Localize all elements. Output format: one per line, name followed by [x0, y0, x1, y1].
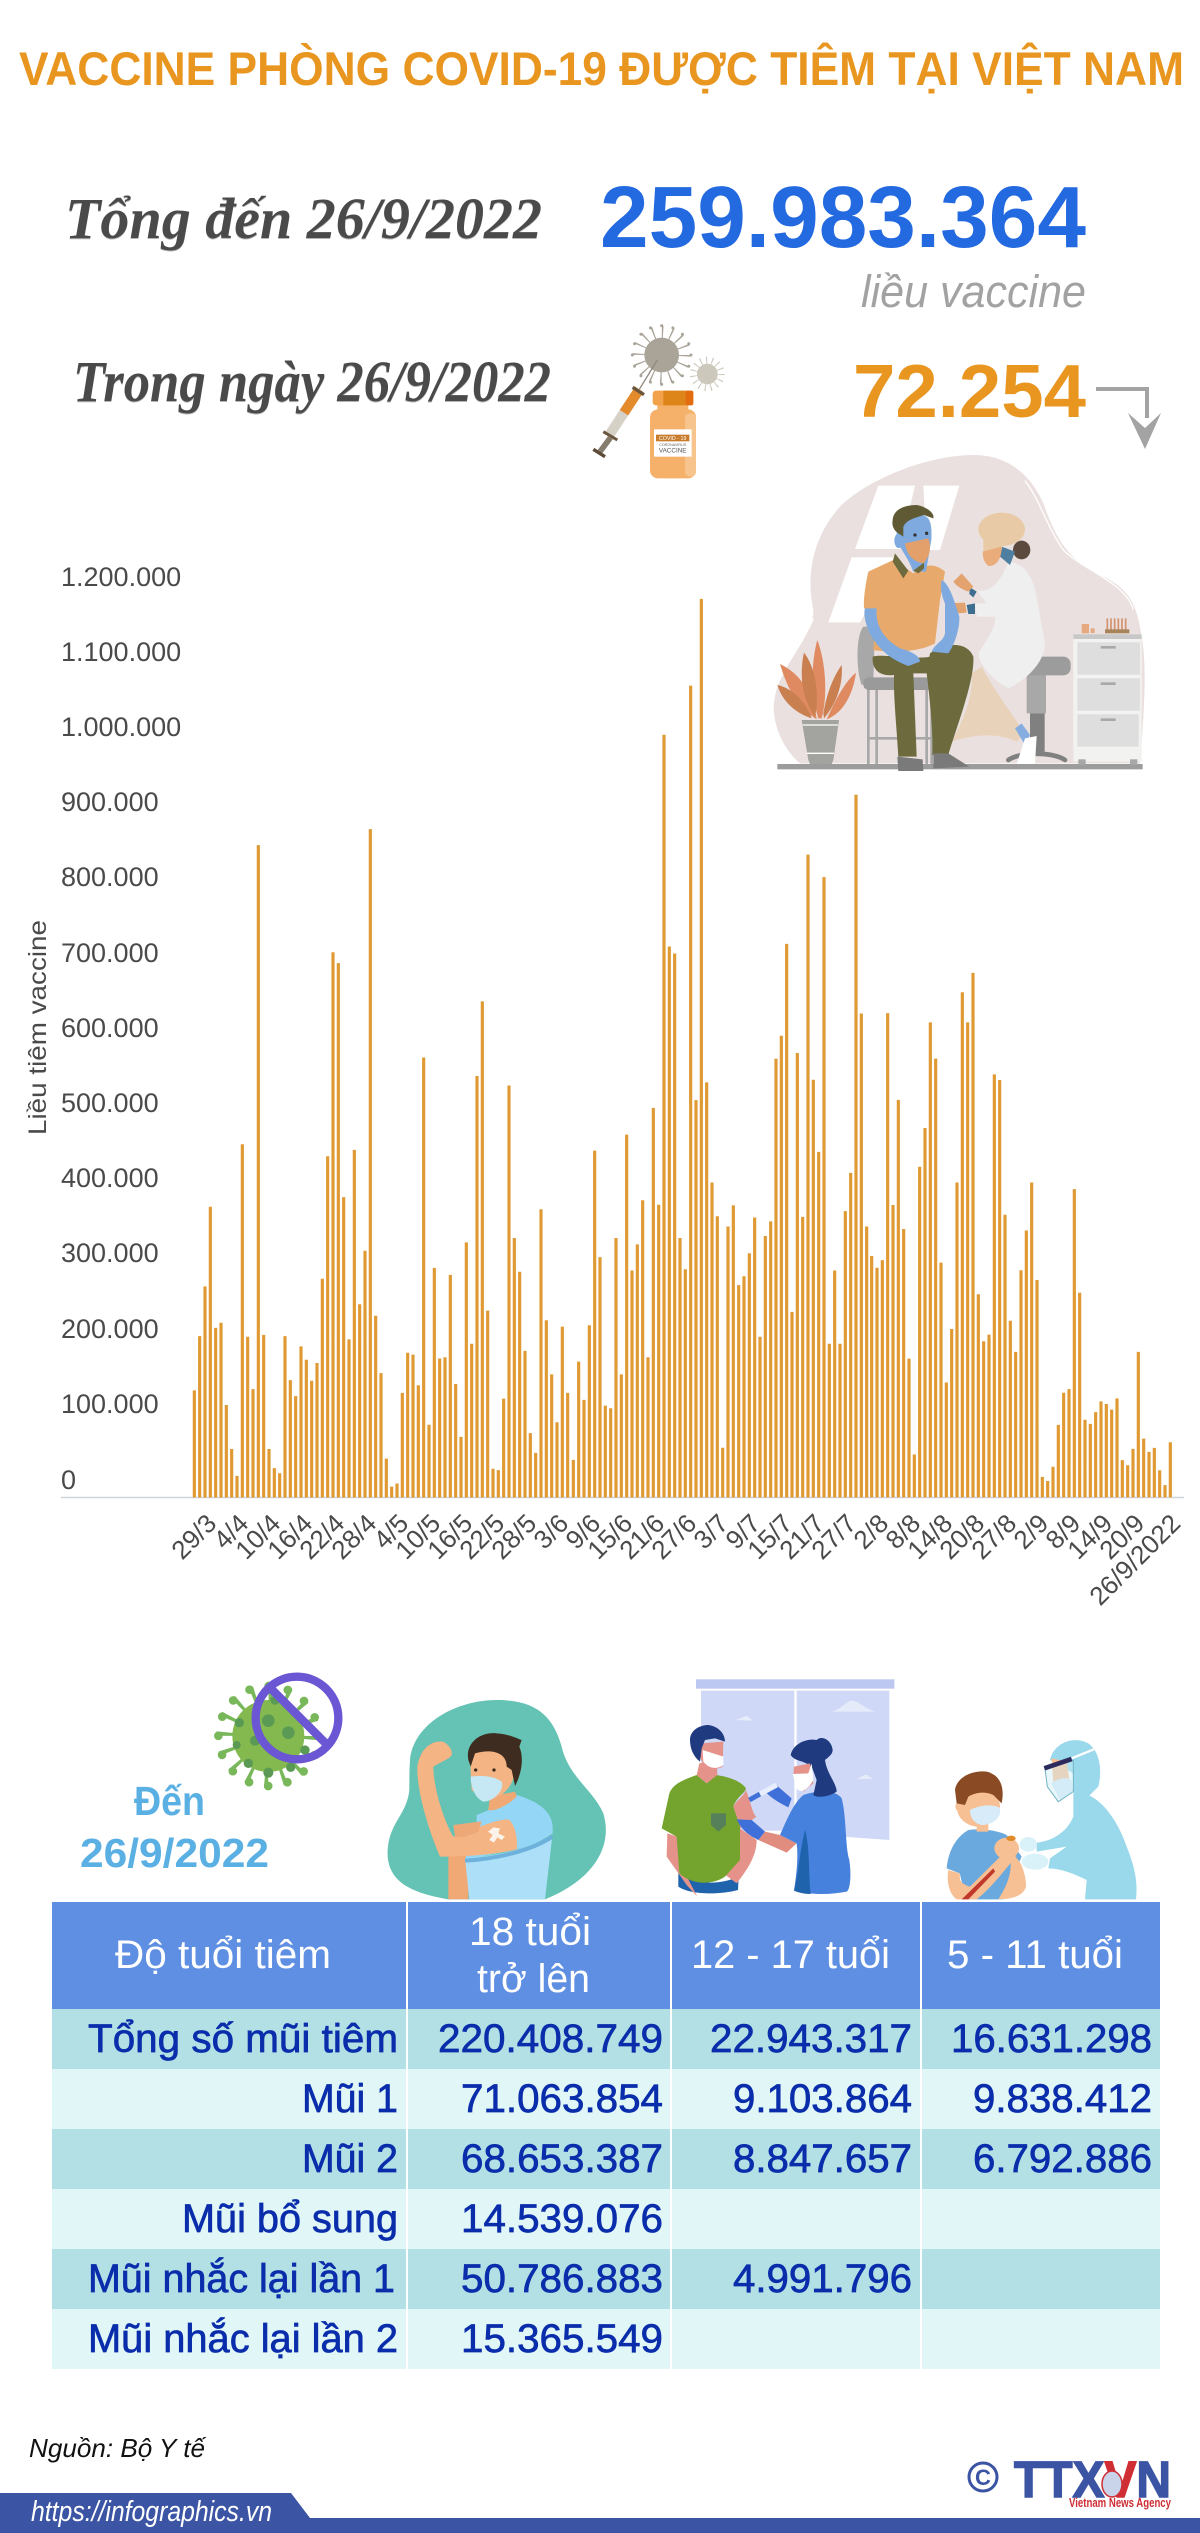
x axis date labels: 14/9 [1061, 1508, 1118, 1565]
table header: Độ tuổi tiêm [115, 1933, 331, 1977]
logo: TTXVN Vietnam News Agency: C [975, 2465, 991, 2490]
logo: TTXVN Vietnam News Agency: TTXVN [1014, 2451, 1171, 2508]
x axis date labels: 22/4 [293, 1508, 350, 1565]
table: doses by age group [52, 1902, 1160, 2369]
row: booster 2 [52, 2309, 1160, 2369]
row: additional dose [52, 2189, 1160, 2249]
x axis date labels: 4/4 [207, 1508, 254, 1555]
y axis labels: 900.000 [61, 787, 159, 817]
x axis date labels [165, 1508, 1186, 1611]
y axis labels: 100.000 [61, 1389, 159, 1419]
table header: 12 - 17 tuổi [691, 1933, 890, 1977]
y axis labels: 1.000.000 [61, 712, 181, 742]
row: dose 2 [52, 2129, 1160, 2189]
x axis date labels: 8/9 [1039, 1508, 1086, 1555]
x axis date labels: 10/5 [389, 1508, 446, 1565]
x axis date labels: 28/4 [325, 1508, 382, 1565]
y axis labels: 1.100.000 [61, 637, 181, 667]
x axis date labels: 3/6 [527, 1508, 574, 1555]
row: dose 2: 68.653.387 [461, 2137, 663, 2181]
row: dose 1 [52, 2069, 1160, 2129]
nurse [945, 513, 1071, 764]
row: total shots: 220.408.749 [438, 2017, 663, 2061]
heading: as of date: 26/9/2022 [80, 1830, 269, 1876]
y axis labels: 600.000 [61, 1013, 159, 1043]
table header [52, 1902, 1160, 2009]
y axis labels: 800.000 [61, 862, 159, 892]
row: booster 1 [52, 2249, 1160, 2309]
label: cumulative total: Tổng đến 26/9/2022 [65, 186, 542, 251]
baseline [61, 1496, 1184, 1498]
illustration: teen 12-17 being vaccinated by window [662, 1679, 894, 1897]
icon: crossed-out virus [218, 1677, 338, 1786]
row: additional dose: Mũi bổ sung [182, 2197, 398, 2241]
label: daily total: Trong ngày 26/9/2022 [73, 349, 551, 414]
row: dose 1: 9.838.412 [973, 2077, 1152, 2121]
y axis labels: 200.000 [61, 1314, 159, 1344]
y axis labels: 700.000 [61, 938, 159, 968]
x axis date labels: 9/7 [719, 1508, 766, 1555]
x axis date labels: 21/6 [613, 1508, 670, 1565]
row: dose 2: Mũi 2 [302, 2137, 398, 2181]
table header: 5 - 11 tuổi [947, 1933, 1123, 1977]
health worker [1020, 1740, 1137, 1899]
x axis date labels: 27/8 [965, 1508, 1022, 1565]
seated man [864, 505, 973, 771]
icon: syringe, virus and vaccine vial: VACCINE [659, 448, 687, 455]
x axis date labels: 16/4 [261, 1508, 318, 1565]
row: booster 1: 50.786.883 [461, 2257, 663, 2301]
nurse [737, 1738, 850, 1894]
y axis labels: 1.200.000 [61, 562, 181, 592]
number: daily doses: 72.254 [853, 349, 1086, 433]
y axis labels: 500.000 [61, 1088, 159, 1118]
x axis date labels: 16/5 [421, 1508, 478, 1565]
row: additional dose: 14.539.076 [461, 2197, 663, 2241]
x axis date labels: 2/9 [1007, 1508, 1054, 1555]
number: cumulative doses: 259.983.364 [600, 169, 1086, 266]
row: booster 2: Mũi nhắc lại lần 2 [88, 2316, 398, 2361]
unit: vaccine doses: liều vaccine [861, 266, 1086, 317]
chart: daily vaccine doses [24, 562, 1186, 1611]
row: dose 1: 71.063.854 [461, 2077, 663, 2121]
x axis date labels: 8/8 [879, 1508, 926, 1555]
row: dose 2: 8.847.657 [733, 2137, 912, 2181]
x axis date labels: 27/7 [805, 1508, 862, 1565]
x axis date labels: 14/8 [901, 1508, 958, 1565]
row: dose 1: 9.103.864 [733, 2077, 912, 2121]
x axis date labels: 15/6 [581, 1508, 638, 1565]
heading: as of date: Đến [134, 1778, 205, 1824]
x axis date labels: 3/7 [687, 1508, 734, 1555]
icon: syringe, virus and vaccine vial [593, 326, 721, 478]
x axis date labels: 15/7 [741, 1508, 798, 1565]
y axis labels: 300.000 [61, 1238, 159, 1268]
row: total shots: 22.943.317 [710, 2017, 912, 2061]
row: total shots [52, 2009, 1160, 2069]
row: total shots: Tổng số mũi tiêm [88, 2017, 398, 2061]
x axis date labels: 28/5 [485, 1508, 542, 1565]
bars [194, 599, 1170, 1498]
teen [662, 1725, 757, 1897]
x axis date labels: 4/5 [367, 1508, 414, 1555]
y axis labels [61, 562, 181, 1495]
footer band with URL [0, 2493, 1200, 2533]
x axis date labels: 20/8 [933, 1508, 990, 1565]
child [947, 1771, 1026, 1899]
panel: headline totals [65, 169, 1161, 449]
x axis date labels: 10/4 [229, 1508, 286, 1565]
row: booster 2: 15.365.549 [461, 2317, 663, 2361]
illustration: adult 18+ with bandaged arm [388, 1700, 606, 1899]
window [696, 1679, 894, 1840]
row: dose 1: Mũi 1 [302, 2077, 398, 2121]
icon: syringe, virus and vaccine vial: CORONAVIRUS [659, 443, 687, 447]
x axis date labels: 29/3 [165, 1508, 222, 1565]
icon: syringe, virus and vaccine vial: COVID - 19 [659, 436, 686, 442]
row: booster 1: 4.991.796 [733, 2257, 912, 2301]
table header: trở lên [477, 1957, 590, 2001]
table header: 18 tuổi [469, 1910, 591, 1954]
x axis date labels: 27/6 [645, 1508, 702, 1565]
x axis date labels: 22/5 [453, 1508, 510, 1565]
heading: as of date [80, 1778, 269, 1876]
source note: Nguồn: Bộ Y tế [29, 2433, 207, 2463]
y axis title: Liều tiêm vaccine [24, 920, 52, 1135]
medicine cabinet [1073, 618, 1142, 765]
footer band with URL: https://infographics.vn [31, 2496, 272, 2528]
y axis labels: 400.000 [61, 1163, 159, 1193]
illustration: nurse vaccinating a seated man [774, 455, 1145, 771]
arrow: decrease [1096, 389, 1161, 449]
x axis date labels: 26/9/2022 [1083, 1508, 1186, 1611]
x axis date labels: 2/8 [847, 1508, 894, 1555]
x axis date labels: 9/6 [559, 1508, 606, 1555]
row: booster 1: Mũi nhắc lại lần 1 [88, 2256, 395, 2301]
x axis date labels: 20/9 [1093, 1508, 1150, 1565]
row: total shots: 16.631.298 [951, 2017, 1152, 2061]
y axis labels: 0 [61, 1465, 76, 1495]
x axis date labels: 21/7 [773, 1508, 830, 1565]
illustration: child 5-11 being vaccinated [947, 1740, 1137, 1899]
row: dose 2: 6.792.886 [973, 2137, 1152, 2181]
